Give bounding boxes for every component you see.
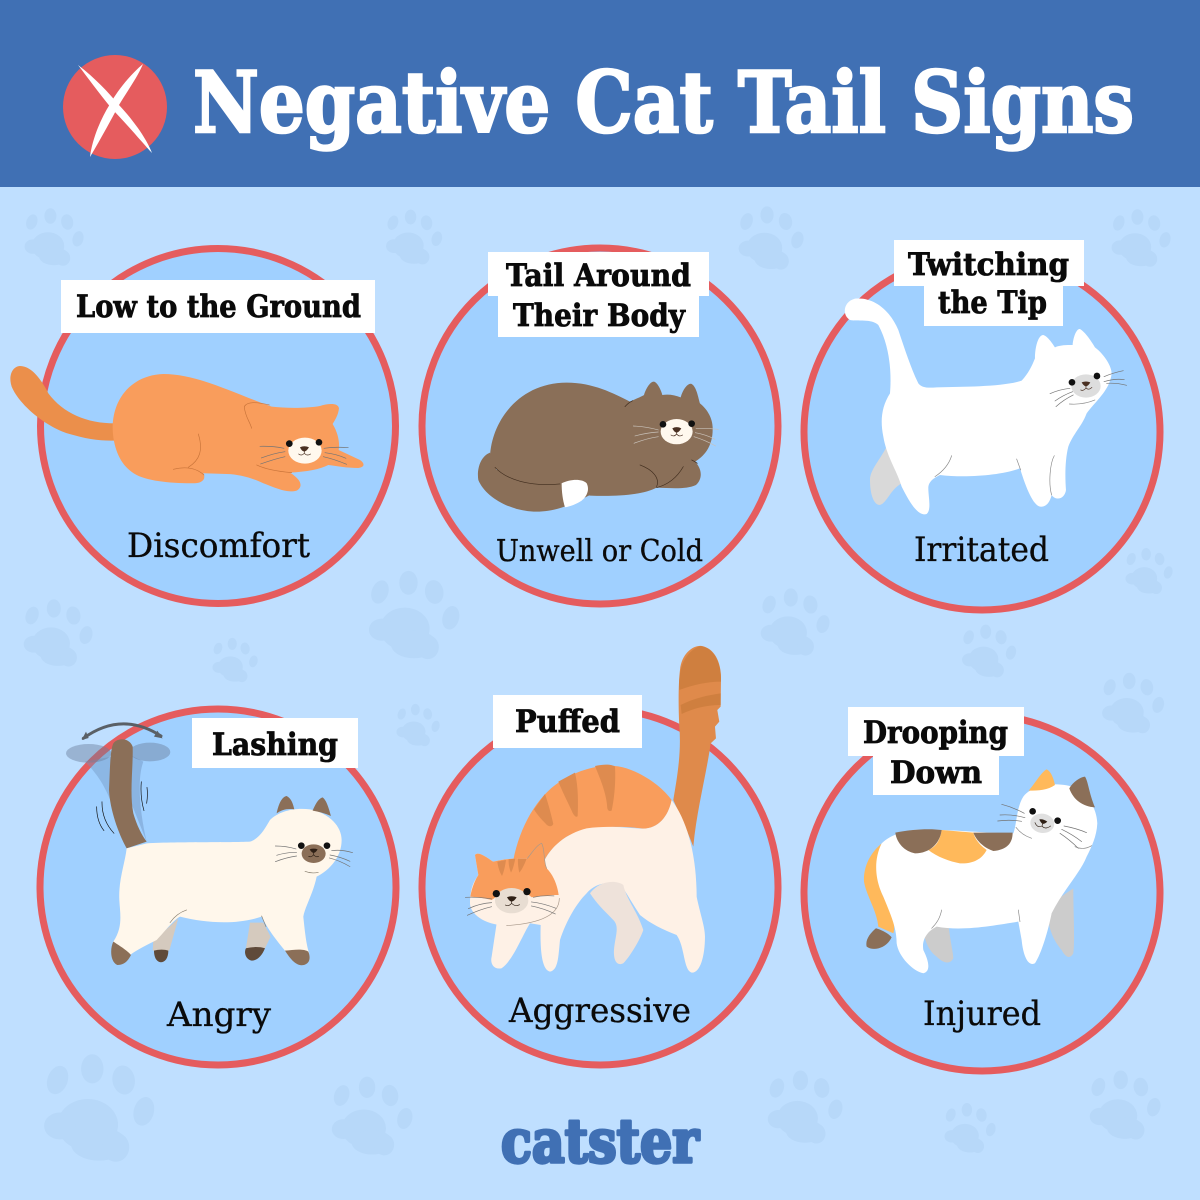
heading label: Tail Around [506, 258, 691, 294]
heading label [192, 718, 358, 768]
panel: drooping down [804, 707, 1160, 1071]
heading label: the Tip [938, 285, 1047, 321]
caption: Unwell or Cold [496, 534, 703, 569]
panel circle [422, 709, 778, 1065]
heading label [493, 695, 642, 748]
caption: Aggressive [508, 991, 691, 1031]
illustration: calico cat with drooping tail [864, 769, 1097, 973]
illustration: siamese cat lashing tail [66, 724, 353, 965]
caption: Angry [166, 995, 272, 1035]
panel circle [40, 248, 396, 604]
illustration: orange cat crouching [10, 366, 364, 491]
panel: tail around their body [422, 248, 778, 604]
header banner [0, 0, 1200, 187]
panel circle [804, 254, 1160, 610]
heading label [848, 707, 1024, 795]
logo: catster: catster [501, 1107, 700, 1177]
caption: Injured [923, 994, 1041, 1034]
panel circle [40, 709, 396, 1065]
panel circle [422, 248, 778, 604]
panel: puffed [422, 646, 778, 1065]
illustration: orange and cream arched cat with puffed tail [465, 646, 721, 973]
heading label: Twitching [908, 247, 1069, 283]
heading label [61, 280, 375, 333]
panel circle [804, 715, 1160, 1071]
panel: lashing [40, 709, 396, 1065]
heading label [894, 240, 1084, 326]
illustration: white cat with raised tail [845, 298, 1127, 514]
icon: red circle with white X [63, 55, 167, 159]
heading label: Lashing [212, 727, 338, 763]
heading label [488, 252, 709, 337]
caption: Irritated [914, 530, 1049, 570]
panel: low to the ground [10, 248, 396, 604]
heading label: Low to the Ground [76, 289, 361, 325]
heading label: Their Body [513, 298, 686, 334]
heading label: Down [890, 755, 982, 791]
heading label: Drooping [863, 715, 1008, 751]
panel: twitching the tip [804, 240, 1160, 610]
illustration: brown cat curled up [478, 382, 718, 512]
heading label: Puffed [515, 704, 620, 740]
caption: Discomfort [127, 526, 310, 566]
background paw prints [23, 206, 1174, 1162]
